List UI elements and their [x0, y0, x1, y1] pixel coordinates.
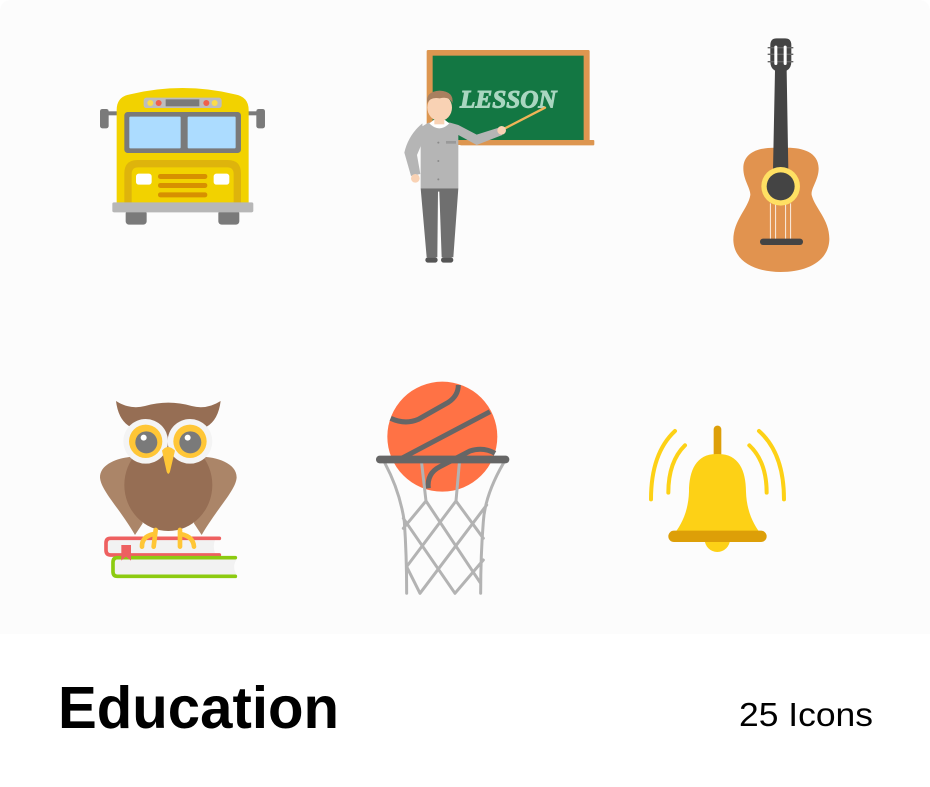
icon: basketball hoop [376, 382, 509, 593]
icon: ringing bell [651, 426, 784, 552]
icon count: 25 Icons [739, 696, 873, 733]
title: Education [58, 675, 339, 741]
board word: LESSON [459, 85, 558, 113]
icon: guitar [733, 38, 829, 272]
icon: teacher at chalkboard [404, 50, 594, 263]
icon: owl on books [100, 401, 237, 576]
icon: school bus [100, 88, 265, 225]
